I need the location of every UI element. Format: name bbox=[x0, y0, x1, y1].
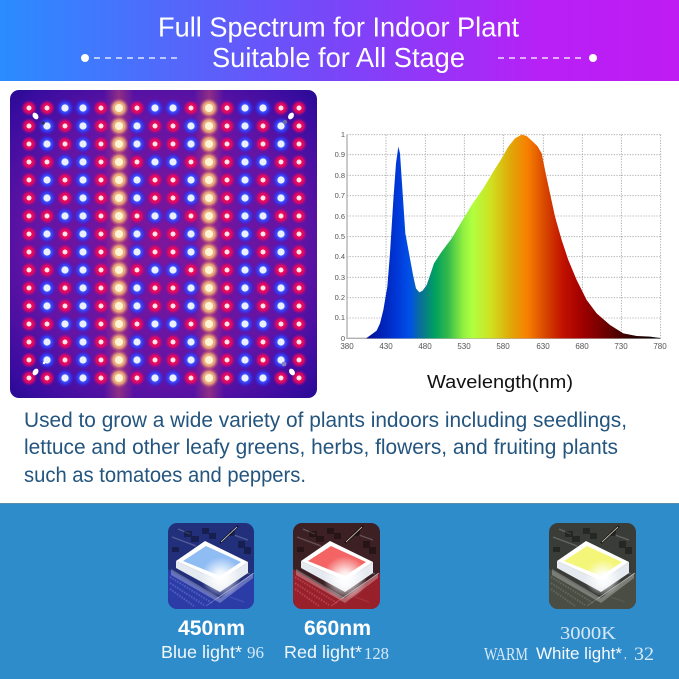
x axis labels: 580 bbox=[496, 342, 510, 351]
y axis labels: 0.1 bbox=[335, 313, 345, 322]
x axis labels: 380 bbox=[340, 342, 354, 351]
label: blue light count: 96 bbox=[247, 643, 264, 662]
right dotted ornament bbox=[498, 54, 597, 62]
title: Suitable for All Stage bbox=[212, 42, 465, 73]
x axis labels: 680 bbox=[575, 342, 589, 351]
label: warm white light count: , bbox=[624, 649, 627, 661]
x axis labels: 430 bbox=[379, 342, 393, 351]
y axis labels: 0.8 bbox=[335, 171, 345, 180]
title bbox=[158, 12, 519, 73]
header banner bbox=[0, 0, 679, 81]
y axis labels: 0.7 bbox=[335, 191, 345, 200]
label: red light count: Red light* bbox=[284, 642, 362, 662]
x axis labels: 730 bbox=[614, 342, 628, 351]
title: Full Spectrum for Indoor Plant bbox=[158, 12, 519, 42]
icon: red LED chip bbox=[293, 523, 380, 609]
description text: lettuce and other leafy greens, herbs, flowers, and fruiting plants bbox=[24, 436, 618, 459]
blue LED item bbox=[161, 523, 264, 662]
label: 660nm: 660nm bbox=[304, 617, 371, 640]
label: 450nm: 450nm bbox=[178, 617, 245, 640]
bottom band bbox=[0, 503, 679, 679]
description text: Used to grow a wide variety of plants indoors including seedlings, bbox=[24, 409, 627, 432]
label: warm white light count: 32 bbox=[634, 644, 654, 665]
warm white LED item bbox=[484, 523, 654, 665]
left dotted ornament bbox=[81, 54, 181, 62]
x axis labels: 780 bbox=[653, 342, 667, 351]
y axis labels: 0.9 bbox=[335, 150, 345, 159]
label: blue light count: Blue light* bbox=[161, 642, 242, 662]
label: warm white light count bbox=[484, 644, 654, 665]
red LED item bbox=[284, 523, 389, 663]
mounting holes bbox=[31, 112, 296, 376]
y axis labels bbox=[335, 130, 345, 343]
y axis labels: 0.6 bbox=[335, 212, 345, 221]
label: red light count: 128 bbox=[364, 644, 389, 663]
spectrum chart bbox=[335, 130, 667, 392]
x axis labels: 480 bbox=[418, 342, 432, 351]
x axis labels: 630 bbox=[536, 342, 550, 351]
y axis labels: 0.5 bbox=[335, 232, 345, 241]
label: 3000K: 3000K bbox=[560, 623, 616, 643]
LED grow light panel bbox=[10, 90, 317, 398]
y axis labels: 0.4 bbox=[335, 252, 345, 261]
description text: such as tomatoes and peppers. bbox=[24, 464, 306, 487]
label: warm white light count: WARM bbox=[484, 644, 528, 664]
y axis labels: 0.3 bbox=[335, 273, 345, 282]
chart plot bbox=[347, 135, 661, 338]
label: red light count bbox=[284, 642, 389, 663]
x axis labels: 530 bbox=[457, 342, 471, 351]
LED grid bbox=[21, 98, 307, 388]
x axis title: Wavelength(nm) bbox=[427, 372, 573, 392]
icon: blue LED chip bbox=[168, 523, 254, 609]
y axis labels: 0 bbox=[341, 334, 345, 343]
y axis labels: 0.2 bbox=[335, 293, 345, 302]
icon: warm white LED chip bbox=[549, 523, 636, 609]
description text bbox=[24, 409, 627, 487]
y axis labels: 1 bbox=[341, 130, 345, 139]
label: warm white light count: White light* bbox=[536, 644, 622, 663]
x axis labels bbox=[340, 342, 667, 351]
